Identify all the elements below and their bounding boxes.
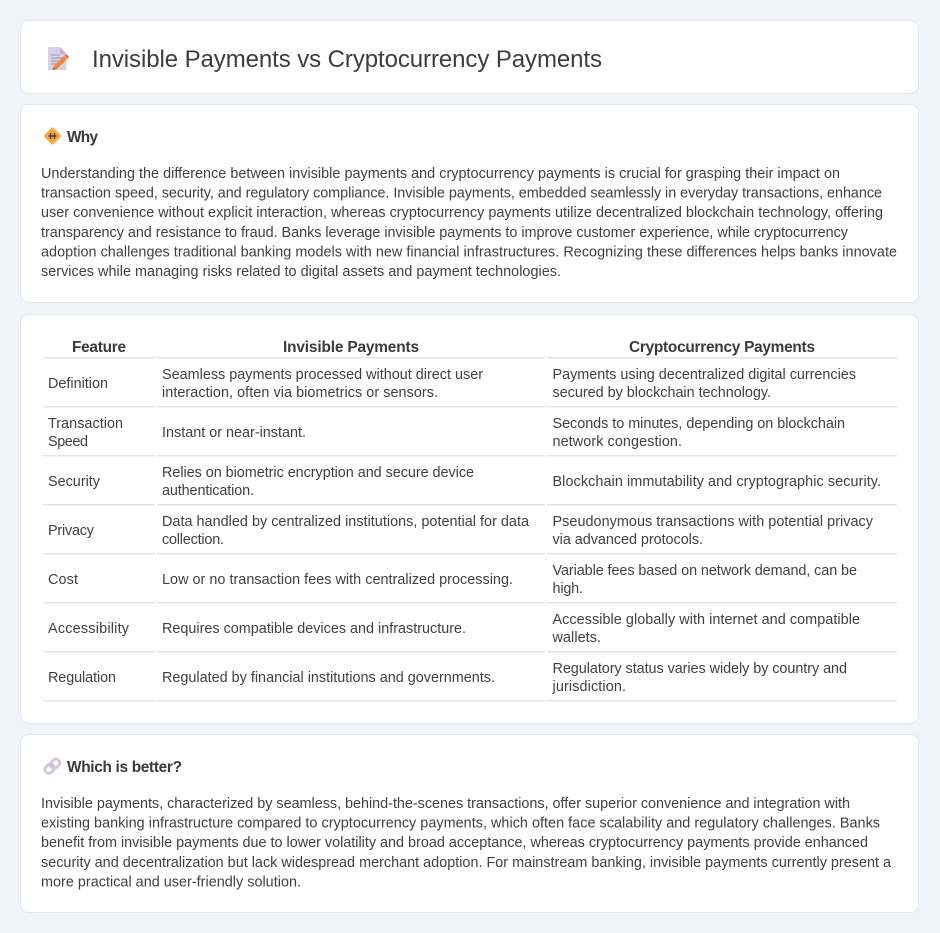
row: transaction speed: network congestion.	[552, 434, 682, 450]
text block: verdict paragraph: Invisible payments, characterized by seamless, behind-the-scenes transactions, offer superior convenience and integration with	[41, 796, 850, 812]
row: regulation: Regulatory status varies widely by country and	[552, 661, 847, 677]
text block: why paragraph: adoption challenges traditional banking models with new financial infrastructures. Recognizing these differences helps banks innovate	[41, 244, 897, 260]
row: cost: Variable fees based on network demand, can be	[552, 563, 857, 579]
row: privacy: Data handled by centralized institutions, potential for data	[162, 514, 529, 530]
icon: chain link	[43, 758, 61, 775]
panel: which is better	[20, 734, 918, 912]
row: cost	[48, 563, 857, 597]
row: transaction speed: Transaction	[48, 416, 123, 432]
row: accessibility: Accessibility	[48, 621, 130, 637]
row: cost: high.	[552, 581, 583, 597]
row: security: authentication.	[162, 483, 254, 499]
row: accessibility	[48, 612, 860, 646]
row: definition: Payments using decentralized digital currencies	[552, 367, 856, 383]
row: definition: secured by blockchain technology.	[552, 385, 771, 401]
row: security	[48, 465, 881, 499]
text block: verdict paragraph	[41, 796, 891, 890]
text block: why paragraph: Understanding the difference between invisible payments and cryptocurrency payments is crucial for grasping their impact on	[41, 166, 840, 182]
row: transaction speed: Seconds to minutes, depending on blockchain	[552, 416, 845, 432]
row: regulation	[48, 661, 847, 695]
row: accessibility: wallets.	[552, 630, 601, 646]
row: regulation: Regulated by financial institutions and governments.	[162, 670, 495, 686]
table header	[72, 339, 815, 356]
text block: verdict paragraph: security and decentralization but lack widespread merchant adoption. For mainstream banking, invisible payments currently present a	[41, 855, 891, 871]
row: transaction speed	[48, 416, 845, 450]
title: Invisible Payments vs Cryptocurrency Payments	[92, 46, 602, 73]
text block: why paragraph: transparency and resistance to fraud. Banks leverage invisible payments to improve customer experience, while cryptocurrency	[41, 225, 849, 241]
row: cost: Cost	[48, 572, 78, 588]
row: transaction speed: Speed	[48, 434, 88, 450]
row: security: Relies on biometric encryption and secure device	[162, 465, 474, 481]
icon: memo with pencil	[48, 47, 69, 70]
table header: Invisible Payments	[283, 339, 419, 356]
icon: diamond sign	[43, 127, 62, 145]
row: definition: Seamless payments processed without direct user	[162, 367, 483, 383]
heading: why: Why	[67, 129, 98, 146]
row: regulation: Regulation	[48, 670, 116, 686]
text block: verdict paragraph: more practical and user-friendly solution.	[41, 874, 301, 890]
panel: header	[20, 20, 918, 94]
row: regulation: jurisdiction.	[552, 679, 626, 695]
row: security: Blockchain immutability and cryptographic security.	[552, 474, 881, 490]
text block: why paragraph: user convenience without explicit interaction, whereas cryptocurrency payments utilize decentralized blockchain technology, offering	[41, 205, 883, 221]
row: accessibility: Accessible globally with internet and compatible	[552, 612, 860, 628]
row: definition: Definition	[48, 376, 108, 392]
panel: why	[20, 104, 918, 302]
text block: verdict paragraph: benefit from invisible payments due to lower volatility and broad acceptance, whereas cryptocurrency payments provide enhanced	[41, 835, 868, 851]
row: security: Security	[48, 474, 101, 490]
text block: why paragraph: transaction speed, security, and regulatory compliance. Invisible payments, embedded seamlessly in everyday transactions, enhance	[41, 186, 882, 202]
row: accessibility: Requires compatible devices and infrastructure.	[162, 621, 466, 637]
row: transaction speed: Instant or near-instant.	[162, 425, 306, 441]
table header: Feature	[72, 339, 126, 356]
row: privacy: via advanced protocols.	[552, 532, 703, 548]
row: privacy: Pseudonymous transactions with potential privacy	[552, 514, 874, 530]
row: privacy: Privacy	[48, 523, 95, 539]
panel: comparison table	[20, 314, 918, 724]
text block: verdict paragraph: existing banking infrastructure compared to cryptocurrency payments, which often face scalability and regulatory challenges. Banks	[41, 816, 880, 832]
row: privacy: collection.	[162, 532, 224, 548]
table header: Cryptocurrency Payments	[629, 339, 815, 356]
text block: why paragraph: services while managing risks related to digital assets and payment technologies.	[41, 264, 561, 280]
row: definition	[48, 367, 856, 401]
row: cost: Low or no transaction fees with centralized processing.	[162, 572, 513, 588]
text block: why paragraph	[41, 166, 897, 280]
row: definition: interaction, often via biometrics or sensors.	[162, 385, 438, 401]
heading: which is better: Which is better?	[67, 759, 182, 776]
row: privacy	[48, 514, 874, 548]
